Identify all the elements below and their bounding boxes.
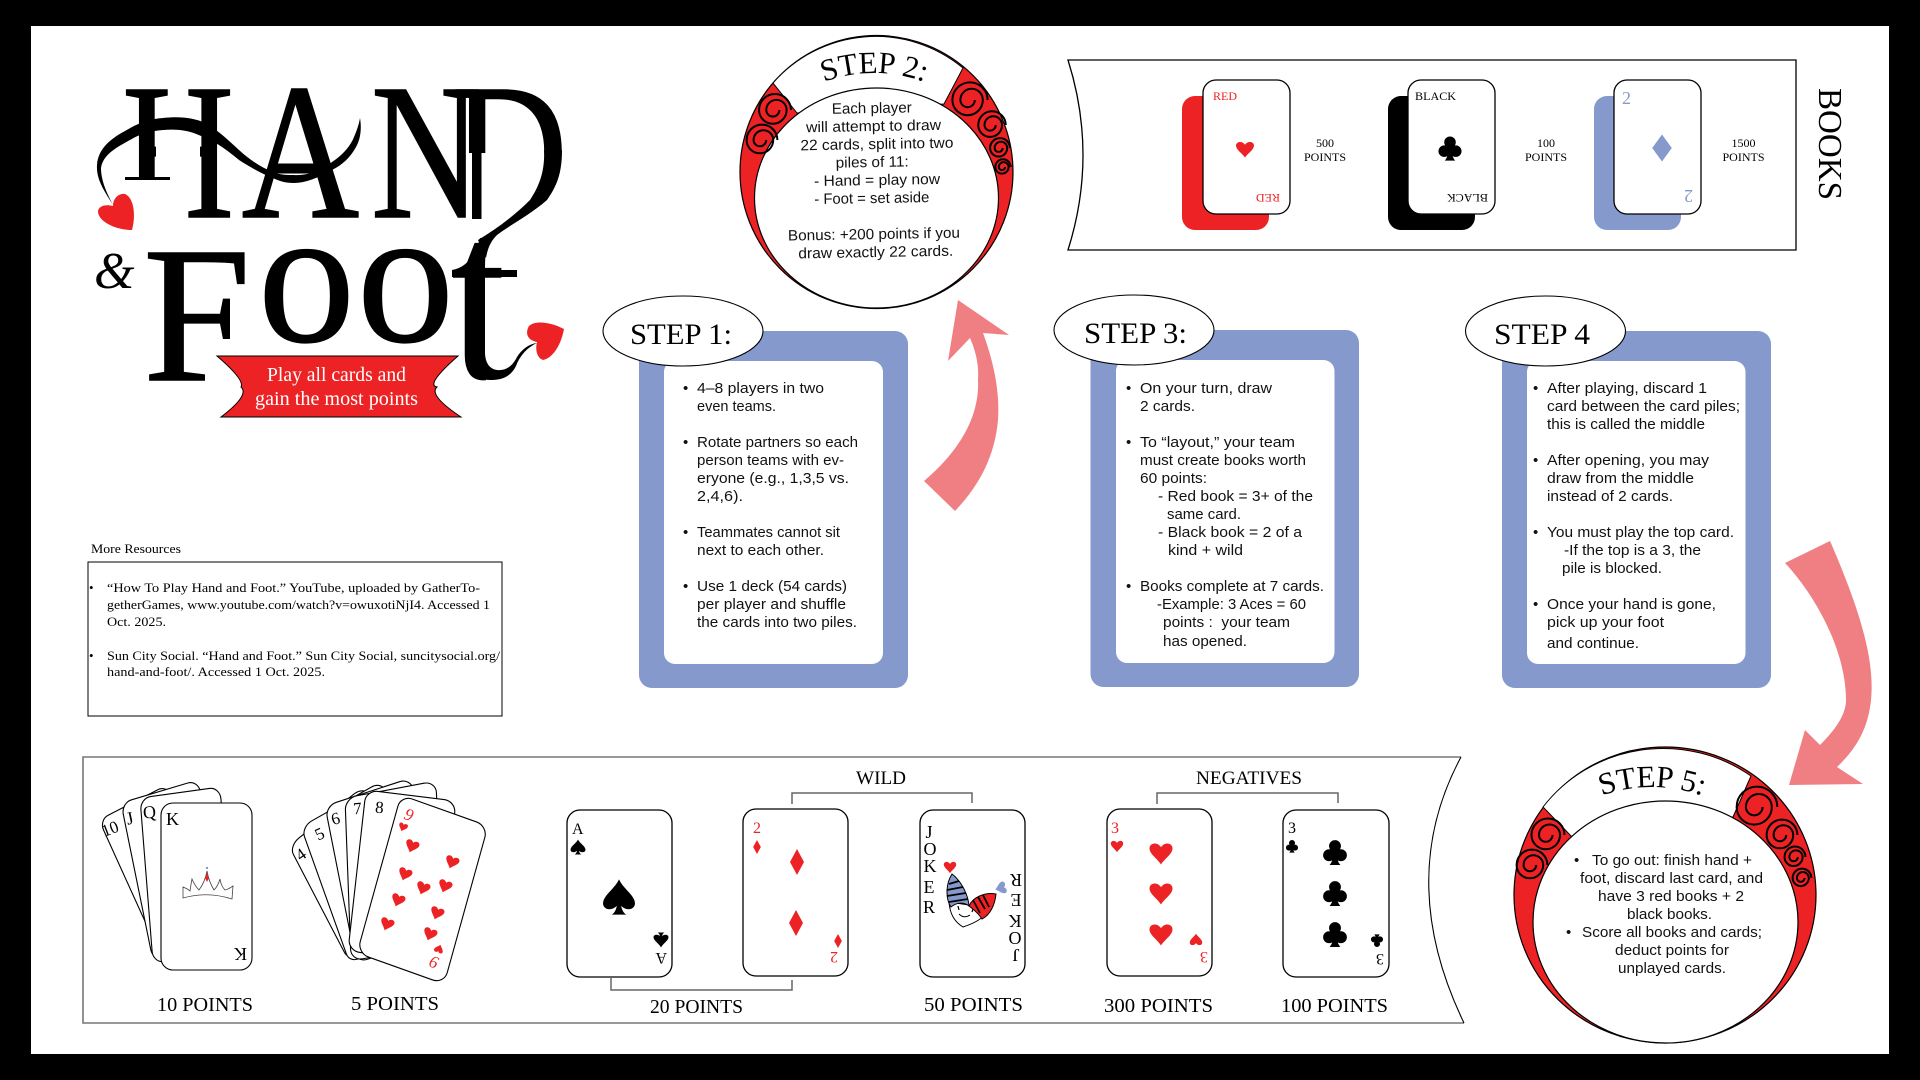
card: two of diamonds: 2 [753, 820, 761, 837]
heading: step 1 [603, 296, 763, 366]
label: 50 points: 50 POINTS [924, 994, 1023, 1016]
text: step 4 body: pick up your foot [1547, 614, 1665, 631]
card: joker: O [924, 839, 936, 859]
card: blue book: 2 [1684, 186, 1693, 206]
card: joker [920, 810, 1025, 977]
title: Hand & Foot logo: o [258, 168, 355, 383]
heading: more resources: More Resources [91, 541, 181, 556]
text: step 5 body: foot, discard last card, and [1580, 870, 1763, 887]
icons: hearts on the 9 [378, 822, 460, 954]
heading: step 5: STEP 5: [1599, 766, 1704, 795]
card: joker: E [924, 877, 934, 897]
cards: 4 to 9 fan: 9 [426, 952, 441, 973]
bracket: negatives: NEGATIVES [1196, 768, 1302, 789]
text: step 2 body: - Foot = set aside [814, 189, 929, 208]
text: step 5 body: black books. [1627, 906, 1712, 923]
text: step 1 body: 4–8 players in two [697, 380, 824, 397]
banner: tagline: Play all cards and [267, 364, 406, 386]
text: step 4 body: • [1533, 380, 1538, 397]
panel: resources: Sun City Social. “Hand and Foot.” Sun City Social, suncitysocial.org/ [107, 648, 500, 663]
text: step 3 body: • [1126, 380, 1131, 397]
text: step 1 body: • [683, 578, 688, 595]
card: red book: RED [1256, 191, 1280, 205]
text: step 4 body: card between the card piles; [1547, 398, 1740, 415]
bracket: wild [792, 768, 972, 804]
panel: resources: hand-and-foot/. Accessed 1 Oct. 2025. [107, 664, 325, 679]
text: step 1 body: the cards into two piles. [697, 614, 857, 631]
text: step 4 body: • [1533, 596, 1538, 613]
text: step 1 body: next to each other. [697, 542, 824, 559]
label: 500 points: 500 [1316, 136, 1334, 150]
arrow: step 1 to step 2 [924, 300, 1009, 511]
card: three of clubs [1283, 810, 1389, 977]
heading: step 4: STEP 4 [1494, 318, 1590, 351]
text: step 1 body [683, 380, 858, 631]
panel: resources: Oct. 2025. [107, 614, 166, 629]
text: step 5 body: deduct points for [1615, 942, 1729, 959]
text: step 3 body: - Red book = 3+ of the [1158, 488, 1313, 505]
text: step 1 body: 2,4,6). [697, 488, 743, 505]
text: step 4 body: and continue. [1547, 635, 1639, 652]
panel: resources: “How To Play Hand and Foot.” YouTube, uploaded by GatherTo- [107, 580, 480, 595]
card: black book: BLACK [1415, 89, 1456, 103]
bracket: negatives [1157, 768, 1338, 804]
card: joker: E [1010, 890, 1022, 910]
text: step 5 body [1566, 852, 1763, 977]
text: step 4 body: this is called the middle [1547, 416, 1705, 433]
title: Hand & Foot logo: o [357, 168, 454, 383]
label: 1500 points: POINTS [1722, 150, 1765, 164]
card: black book: BLACK [1447, 191, 1488, 205]
text: step 3 body: • [1126, 434, 1131, 451]
text: step 2 body: draw exactly 22 cards. [798, 243, 953, 262]
panel: books [1068, 60, 1796, 250]
text: step 5 body: • [1566, 924, 1571, 941]
panel: step 2 circle [739, 34, 1014, 310]
text: step 3 body: To “layout,” your team [1140, 434, 1295, 451]
title: Hand & Foot logo: D [451, 44, 568, 259]
text: step 1 body: person teams with ev- [697, 452, 844, 469]
card: joker: K [924, 856, 936, 876]
icon: step 5 swirls [1517, 787, 1811, 886]
heading: step 3 [1054, 295, 1214, 365]
panel: resources: getherGames, www.youtube.com/watch?v=owuxotiNjI4. Accessed 1 [107, 597, 490, 612]
text: step 2 body: Each player [832, 99, 912, 118]
text: step 4 body: • [1533, 524, 1538, 541]
panel: step 1 [603, 296, 908, 688]
text: step 1 body: • [683, 380, 688, 397]
title: Hand & Foot logo [96, 88, 564, 418]
text: step 5 body: • [1574, 852, 1579, 869]
label: 1500 points: 1500 [1732, 136, 1756, 150]
card: joker: O [1008, 928, 1022, 948]
label: 100 points: 100 [1537, 136, 1555, 150]
text: step 4 body: • [1533, 452, 1538, 469]
label: 1500 points [1722, 136, 1765, 164]
text: step 4 body: After opening, you may [1547, 452, 1710, 469]
text: step 3 body: 2 cards. [1140, 398, 1195, 415]
text: step 1 body: • [683, 434, 688, 451]
cards: 4 to 9 fan: 5 [312, 824, 328, 844]
label: 5 points: 5 POINTS [351, 993, 439, 1015]
panel: resources [88, 562, 502, 716]
bracket: wild: WILD [856, 768, 906, 789]
cards: 10 J Q K fan: J [124, 808, 135, 829]
heading: step 3: STEP 3: [1084, 317, 1187, 350]
panel: step 4 [1466, 296, 1771, 688]
text: step 5 body: unplayed cards. [1618, 960, 1726, 977]
card: joker: J [1012, 945, 1020, 965]
card: joker: R [923, 897, 935, 917]
cards: 10 J Q K fan: K [234, 944, 247, 964]
text: step 3 body: points : your team [1163, 614, 1290, 631]
label: 100 points: 100 POINTS [1281, 995, 1388, 1017]
cards: 4 to 9 fan [289, 778, 488, 984]
title: Hand & Foot logo: F [143, 207, 251, 422]
card: three of clubs: 3 [1288, 820, 1296, 837]
bracket: 20 points: 20 POINTS [650, 996, 743, 1018]
text: step 4 body: pile is blocked. [1562, 560, 1662, 577]
text: step 1 body: Use 1 deck (54 cards) [697, 578, 847, 595]
text: step 2 body: 22 cards, split into two [800, 135, 954, 154]
icon: step 2 swirls [747, 82, 1011, 174]
title: Hand & Foot logo: H [122, 44, 234, 259]
text: step 3 body: -Example: 3 Aces = 60 [1157, 596, 1306, 613]
card: three of hearts: 3 [1111, 820, 1119, 837]
card: ace of spades: A [655, 949, 667, 966]
cards: 10 J Q K fan: K [166, 809, 179, 829]
cards: 4 to 9 fan: 9 [402, 804, 417, 825]
cards: 4 to 9 fan: 7 [352, 799, 363, 818]
text: step 3 body [1126, 380, 1324, 650]
text: step 3 body: 60 points: [1140, 470, 1207, 487]
text: step 4 body: Once your hand is gone, [1547, 596, 1716, 613]
arrow: step 4 to step 5 [1785, 541, 1872, 785]
heading: books: BOOKS [1811, 88, 1848, 200]
text: step 4 body: You must play the top card. [1547, 524, 1734, 541]
label: 500 points [1304, 136, 1346, 164]
text: step 4 body: instead of 2 cards. [1547, 488, 1673, 505]
cards: 10 J Q K fan: 10 [99, 817, 121, 841]
text: step 2 body: will attempt to draw [805, 117, 941, 136]
banner: tagline [217, 356, 461, 417]
cards: 10 J Q K fan: Q [142, 801, 157, 823]
card: red book [1182, 80, 1290, 230]
panel: step 3 [1054, 295, 1359, 687]
text: step 2 body: piles of 11: [836, 153, 909, 172]
text: step 4 body: -If the top is a 3, the [1564, 542, 1701, 559]
icon: crown [183, 867, 233, 899]
text: step 3 body: has opened. [1163, 633, 1247, 650]
heading: step 2: STEP 2: [821, 52, 926, 81]
text: step 3 body: kind + wild [1168, 542, 1243, 559]
card: three of clubs: 3 [1376, 950, 1384, 967]
text: step 5 body: have 3 red books + 2 [1598, 888, 1744, 905]
text: step 2 body: Bonus: +200 points if you [788, 225, 960, 245]
label: 300 points: 300 POINTS [1104, 995, 1213, 1017]
text: step 1 body: eryone (e.g., 1,3,5 vs. [697, 470, 849, 487]
cards: 10 J Q K fan [99, 780, 252, 970]
card: blue book: 2 [1622, 88, 1631, 108]
panel: resources: • [89, 580, 94, 595]
title: Hand & Foot logo: A [242, 44, 359, 259]
card: three of hearts: 3 [1200, 948, 1208, 965]
text: step 5 body: To go out: finish hand + [1592, 852, 1752, 869]
cards: 4 to 9 fan: 8 [374, 798, 385, 817]
text: step 1 body: • [683, 524, 688, 541]
label: 100 points [1525, 136, 1567, 164]
panel: resources: • [89, 648, 94, 663]
text: step 3 body: Books complete at 7 cards. [1140, 578, 1324, 595]
icon: jester heart [944, 862, 1007, 927]
text: step 3 body: - Black book = 2 of a [1158, 524, 1303, 541]
text: step 4 body [1533, 380, 1740, 652]
text: step 3 body: must create books worth [1140, 452, 1306, 469]
card: black book [1388, 80, 1495, 230]
panel: step 5 circle [1513, 746, 1817, 1044]
text: step 3 body: • [1126, 578, 1131, 595]
card: ace of spades: A [572, 821, 584, 838]
title: Hand & Foot logo: t [451, 165, 506, 430]
card: joker: R [1010, 870, 1022, 890]
label: 10 points: 10 POINTS [157, 994, 253, 1016]
card: blue book [1594, 80, 1701, 230]
card: three of hearts [1107, 809, 1212, 976]
title: Hand & Foot logo: & [94, 243, 135, 300]
text: step 5 body: Score all books and cards; [1582, 924, 1762, 941]
text: step 2 body [786, 99, 960, 263]
text: step 1 body: Teammates cannot sit [697, 524, 841, 541]
text: step 4 body: After playing, discard 1 [1547, 380, 1707, 397]
bracket: 20 points [611, 978, 792, 1018]
card: joker: J [925, 822, 933, 842]
cards: 4 to 9 fan: 6 [329, 808, 342, 829]
text: step 1 body: Rotate partners so each [697, 434, 858, 451]
card: two of diamonds: 2 [830, 948, 838, 965]
banner: tagline: gain the most points [255, 388, 418, 410]
text: step 3 body: same card. [1167, 506, 1241, 523]
text: step 4 body: draw from the middle [1547, 470, 1694, 487]
text: step 1 body: even teams. [697, 398, 776, 415]
title: Hand & Foot logo: N [371, 44, 482, 259]
panel: card values [83, 757, 1464, 1023]
cards: 4 to 9 fan: 4 [292, 844, 310, 865]
card: two of diamonds [743, 809, 848, 976]
text: step 1 body: per player and shuffle [697, 596, 846, 613]
label: 100 points: POINTS [1525, 150, 1567, 164]
card: ace of spades [567, 810, 672, 977]
card: red book: RED [1213, 89, 1237, 103]
heading: step 1: STEP 1: [630, 318, 732, 351]
text: step 2 body: - Hand = play now [814, 171, 940, 190]
card: joker: K [1008, 911, 1022, 931]
text: step 3 body: On your turn, draw [1140, 380, 1272, 397]
heading: step 4 [1466, 296, 1626, 366]
label: 500 points: POINTS [1304, 150, 1346, 164]
